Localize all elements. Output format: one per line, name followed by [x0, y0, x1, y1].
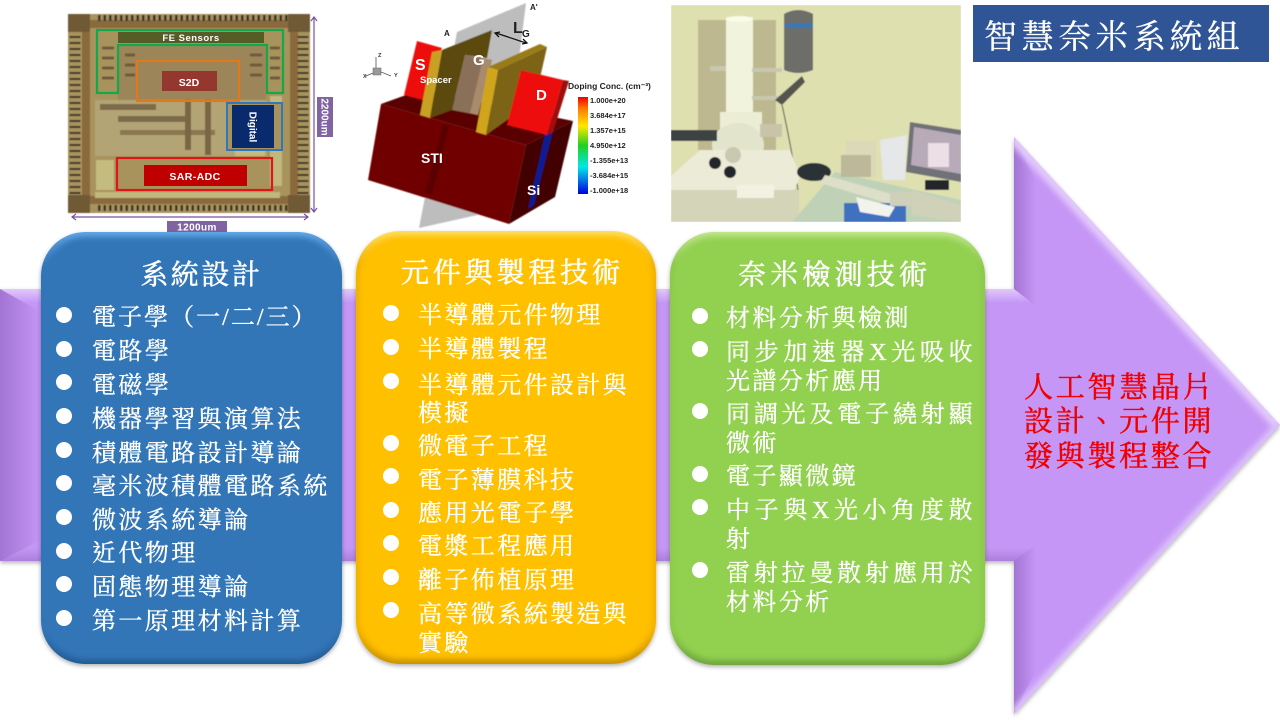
device labels: S: [415, 57, 426, 74]
dimension: 1200um: 1200um: [177, 222, 217, 234]
course list: 電子學（一/二/三）: [92, 304, 318, 331]
title box: 智慧奈米系統組: [984, 19, 1244, 56]
heading: 系統設計: 系統設計: [140, 259, 260, 291]
course list: 半導體元件設計與: [418, 372, 629, 399]
course list: 第一原理材料計算: [92, 608, 303, 635]
course list: 光譜分析應用: [726, 368, 884, 395]
heading: 元件與製程技術: 元件與製程技術: [401, 257, 620, 289]
device labels: D: [536, 87, 547, 104]
device labels: L: [513, 20, 523, 37]
course list: 機器學習與演算法: [92, 406, 303, 433]
device labels: G: [522, 29, 530, 40]
doping legend: -1.000e+18: [590, 186, 628, 195]
image: chip layout micrograph: [68, 14, 333, 234]
course list: 中子與X光小角度散: [726, 497, 975, 524]
course list: [92, 304, 330, 635]
doping legend: [568, 81, 651, 195]
course list: 電路學: [92, 338, 171, 365]
course list: 微術: [726, 430, 779, 457]
course list: 半導體製程: [418, 336, 550, 363]
course list: 射: [726, 526, 752, 553]
chip block: Digital: Digital: [246, 112, 258, 142]
course list: 模擬: [418, 400, 471, 427]
course list: 電漿工程應用: [418, 533, 576, 560]
bullet dots: [383, 305, 399, 618]
arrow caption: [1024, 371, 1214, 473]
panel: 元件與製程技術: [356, 231, 656, 664]
bullet dots: [56, 307, 72, 626]
course list: 應用光電子學: [418, 500, 576, 527]
device labels: G: [473, 52, 485, 69]
axis triad: X: [363, 74, 367, 80]
course list: 毫米波積體電路系統: [92, 473, 330, 500]
course list: 離子佈植原理: [418, 567, 576, 594]
course list: 材料分析: [726, 589, 832, 616]
course list: 實驗: [418, 630, 471, 657]
device labels: Si: [527, 182, 540, 198]
arrow caption: 設計、元件開: [1024, 405, 1214, 438]
course list: 微波系統導論: [92, 507, 250, 534]
doping legend: 1.000e+20: [590, 96, 626, 105]
chip block: Digital: [227, 103, 282, 150]
course list: 高等微系統製造與: [418, 601, 629, 628]
dimension: 1200um: [72, 214, 308, 234]
chip block: S2D: [137, 61, 239, 101]
course list: 雷射拉曼散射應用於: [726, 560, 975, 587]
axis triad: [363, 53, 398, 80]
course list: 近代物理: [92, 540, 198, 567]
device labels: A': [530, 3, 538, 12]
course list: 半導體元件物理: [418, 302, 603, 329]
chip block: SAR-ADC: [117, 158, 272, 190]
doping legend: -1.355e+13: [590, 156, 628, 165]
axis triad: Z: [378, 53, 382, 59]
dimension: 2200um: 2200um: [318, 98, 330, 136]
doping legend: Doping Conc. (cm⁻³): [568, 81, 651, 91]
course list: 積體電路設計導論: [92, 440, 303, 467]
gate length arrow: [495, 32, 527, 44]
course list: [418, 302, 629, 657]
arrow caption: 人工智慧晶片: [1024, 371, 1214, 404]
course list: 電子薄膜科技: [418, 467, 576, 494]
doping legend: 3.684e+17: [590, 111, 626, 120]
device labels: Spacer: [420, 75, 452, 86]
chip block: FE Sensors: FE Sensors: [162, 33, 220, 44]
dimension: 2200um: [311, 17, 333, 212]
device labels: A: [444, 29, 450, 38]
course list: 電子顯微鏡: [726, 463, 858, 490]
arrow caption: 發與製程整合: [1024, 440, 1214, 473]
doping legend: -3.684e+15: [590, 171, 628, 180]
course list: [726, 305, 975, 616]
chip block: FE Sensors: [97, 30, 283, 93]
axis triad: Y: [394, 73, 398, 79]
heading: 奈米檢測技術: 奈米檢測技術: [738, 259, 927, 291]
chip block: SAR-ADC: SAR-ADC: [169, 171, 221, 183]
image: FinFET device doping simulation: [363, 3, 651, 228]
device labels: [415, 3, 547, 198]
course list: 同步加速器X光吸收: [726, 339, 975, 366]
title box: [973, 5, 1269, 62]
course list: 微電子工程: [418, 433, 550, 460]
doping legend: 1.357e+15: [590, 126, 626, 135]
device labels: STI: [421, 150, 443, 166]
image: electron microscope lab photo: [671, 5, 961, 222]
chip block: S2D: S2D: [179, 77, 200, 89]
panel: 奈米檢測技術: [670, 232, 985, 665]
bullet dots: [692, 308, 708, 578]
panel: 系統設計: [41, 232, 342, 664]
course list: 固態物理導論: [92, 574, 250, 601]
doping legend: 4.950e+12: [590, 141, 626, 150]
course list: 同調光及電子繞射顯: [726, 401, 975, 428]
course list: 電磁學: [92, 372, 171, 399]
course list: 材料分析與檢測: [726, 305, 911, 332]
